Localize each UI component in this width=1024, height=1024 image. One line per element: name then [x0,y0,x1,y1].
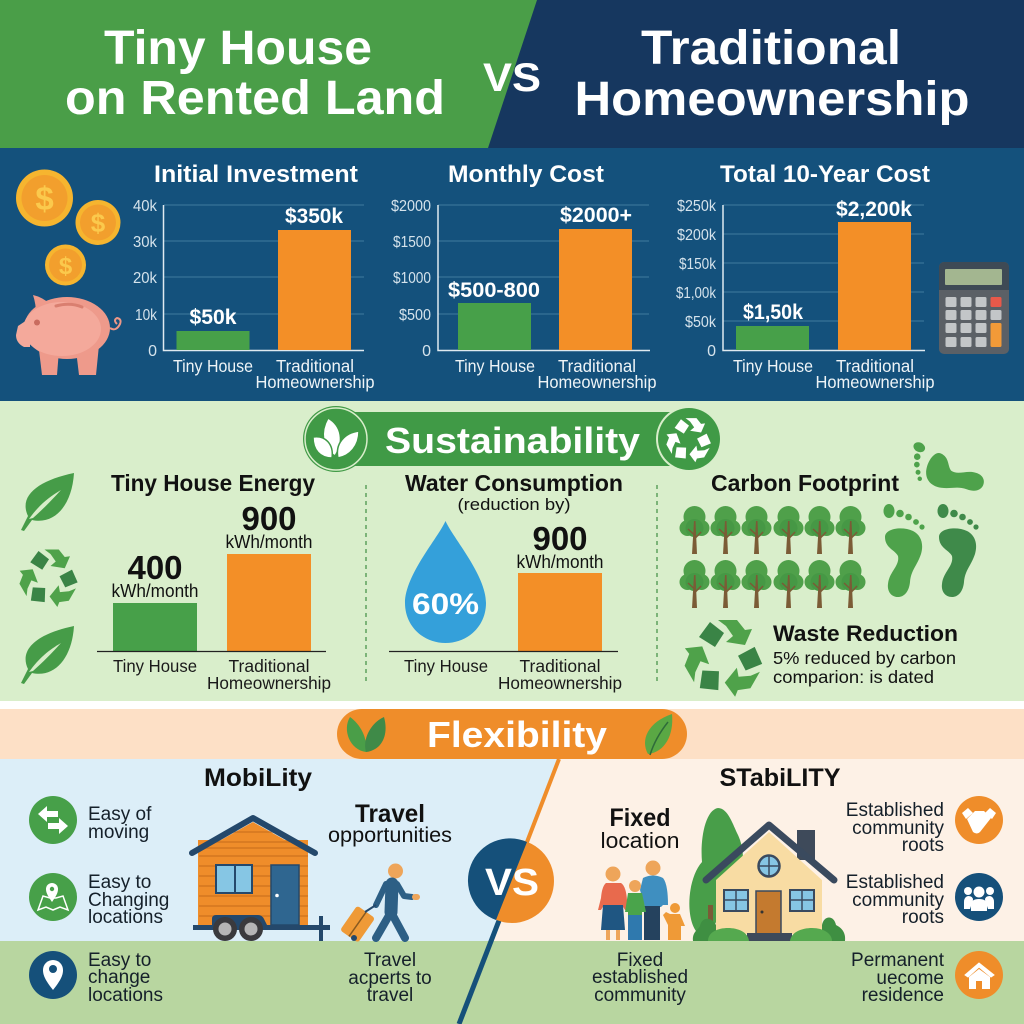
heading: flexibility: Flexibility [427,714,607,755]
chart: monthly cost: $1500 [393,234,431,251]
chart: total 10-year cost: Tiny House [733,356,813,376]
chart: initial investment: 10k [135,307,158,324]
text: fixed location [600,804,680,853]
chart title: Monthly Cost [448,161,604,188]
text: established community roots 2: roots [902,907,944,928]
bar: tiny house [736,326,809,350]
chart: water consumption: Water Consumption [405,470,623,496]
chart: water consumption: Traditional [520,656,600,676]
illustration: tiny house on trailer [192,818,330,941]
text: travel acperts to travel [348,950,432,1006]
icon: recycle left [14,550,83,610]
icon: handshake [955,796,1003,844]
text: established community roots 2 [846,872,944,928]
chart: tiny house energy: Tiny House [113,656,197,676]
text: established community roots 1: Established [846,800,944,821]
bar: 900 [518,573,602,651]
heading: mobility: MobiLity [204,764,312,792]
icon: coins: $ [59,253,73,280]
illustration: family [598,860,685,940]
chart: total 10-year cost: Traditional [836,356,914,376]
chart: total 10-year cost [676,161,934,392]
waste reduction text: comparion: is dated [773,667,934,687]
panel: costs [0,148,1024,401]
badge: vs [468,838,554,923]
bar: traditional [278,230,351,350]
waste reduction text: 5% reduced by carbon [773,648,956,668]
chart: total 10-year cost: $1,50k [743,301,803,324]
text: easy to changing locations: locations [88,907,163,928]
chart: initial investment: $50k [190,306,237,329]
text: travel opportunities [328,800,452,847]
text: established community roots 2: Established [846,872,944,893]
chart: initial investment: 20k [133,270,158,287]
chart: initial investment: Tiny House [173,356,253,376]
text: easy to changing locations [88,872,169,928]
chart: monthly cost: $500-800 [448,279,540,302]
text: fixed location: location [600,828,680,853]
header banner [0,0,1024,148]
chart: tiny house energy: 900 [241,500,297,537]
icon: location pin [29,951,77,999]
title: tiny house: Tiny House [104,22,372,75]
text: fixed established community [592,950,688,1006]
text: easy of moving [88,804,152,843]
diagonal divider [459,759,559,1024]
icon: leaf top [21,473,74,531]
chart: initial investment [133,161,374,392]
icon: footprints [884,440,988,597]
chart: initial investment: 0 [148,343,157,360]
text: easy of moving: Easy of [88,804,152,825]
chart: monthly cost: $1000 [393,270,431,287]
chart: initial investment: 40k [133,198,158,215]
icon: coins: $ [91,208,106,238]
icon: piggy bank [16,295,121,375]
text: established community roots 1 [846,800,944,856]
chart: water consumption: Homeownership [498,673,622,693]
text: travel acperts to travel: Travel [364,950,416,971]
icon: people [955,873,1003,921]
icon: house [955,951,1003,999]
icon: leaf bottom [21,626,74,684]
text: established community roots 1: community [852,818,944,839]
chart: total 10-year cost: $2,200k [836,198,912,221]
chart title: Initial Investment [154,161,358,188]
chart: monthly cost: $2000+ [560,204,632,227]
icon: coins [16,170,120,286]
chart: monthly cost [391,161,656,392]
text: established community roots 1: roots [902,835,944,856]
text: easy to changing locations: Easy to [88,872,151,893]
title: on rented land: on Rented Land [65,72,445,125]
panel: flexibility [0,709,1024,1024]
icon: trees [680,506,866,608]
title: vs: VS [483,56,541,100]
heading: sustainability [303,406,722,472]
chart: monthly cost: $2000 [391,198,431,215]
text: travel acperts to travel: acperts to [348,968,432,989]
chart: monthly cost: Homeownership [538,372,656,392]
bar: tiny house [458,303,531,350]
chart: water consumption: 900 [532,520,588,557]
chart: initial investment: Traditional [276,356,354,376]
chart: tiny house energy: Tiny House Energy [111,470,315,496]
bar: tiny house [176,331,250,350]
text: travel acperts to travel: travel [367,985,413,1006]
bar: traditional [838,222,911,350]
chart: tiny house energy: Homeownership [207,673,331,693]
chart: total 10-year cost: $150k [679,256,717,273]
heading: sustainability: Sustainability [385,420,640,461]
carbon footprint [677,440,988,701]
chart: water consumption: kWh/month [516,552,604,572]
badge: vs: VS [485,862,539,904]
text: permanent uecome residence [851,950,945,1006]
chart: water consumption: Tiny House [404,656,488,676]
chart: initial investment: Homeownership [256,372,374,392]
chart: initial investment: $350k [285,205,343,228]
chart: initial investment: 30k [133,234,158,251]
bar: 900 [227,554,311,651]
chart: water consumption: (reduction by) [458,495,570,514]
chart: tiny house energy: kWh/month [226,532,312,552]
chart: total 10-year cost: $50k [685,314,717,331]
bar: traditional [559,229,632,350]
icon: recycle [677,620,769,701]
heading: stability: STabiLITY [720,764,841,792]
chart: tiny house energy: 400 [127,549,183,586]
chart: total 10-year cost: 0 [707,343,716,360]
heading: flexibility [337,709,687,759]
chart: monthly cost: 0 [422,343,431,360]
text: fixed established community: established [592,967,688,988]
text: travel opportunities: opportunities [328,824,452,847]
icon: recycle white [662,418,715,465]
text: established community roots 2: community [852,890,944,911]
icon: leaves [313,418,359,458]
text: easy of moving: moving [88,822,149,843]
text: easy to change locations [88,950,163,1006]
waste reduction text [773,621,958,687]
chart: total 10-year cost: Homeownership [816,372,934,392]
text: fixed location: Fixed [610,804,670,832]
icon: left leaves [347,717,386,752]
icon: water drop [405,521,486,643]
chart: water consumption [389,470,623,693]
icon: map [29,873,77,921]
waste reduction text: Waste Reduction [773,621,958,646]
illustration: house with tree [689,808,845,941]
text: travel opportunities: Travel [355,800,425,828]
bar: 400 [113,603,197,651]
chart: monthly cost: $500 [399,307,431,324]
panel: sustainability [0,401,1024,701]
text: easy to change locations: Easy to [88,950,151,971]
chart: tiny house energy [97,470,331,693]
icon: coins: $ [35,180,54,217]
text: fixed established community: community [594,985,686,1006]
text: permanent uecome residence: Permanent [851,950,945,971]
text: easy to change locations: locations [88,985,163,1006]
carbon footprint: Carbon Footprint [711,470,899,496]
text: fixed established community: Fixed [617,950,663,971]
icon: arrows [29,796,77,844]
chart: total 10-year cost: $1,00k [676,285,717,302]
text: permanent uecome residence: uecome [876,968,944,989]
chart: monthly cost: Tiny House [455,356,535,376]
text: easy to changing locations: Changing [88,890,169,911]
icon: right leaf [645,714,672,755]
chart: monthly cost: Traditional [558,356,636,376]
chart: total 10-year cost: $200k [677,227,717,244]
chart: total 10-year cost: $250k [677,198,717,215]
illustration: traveler with suitcase [340,864,420,943]
title: traditional: Traditional [641,22,901,75]
icon: calculator [939,262,1009,354]
chart title: Total 10-Year Cost [720,161,930,188]
chart: tiny house energy: Traditional [228,656,310,676]
text: easy to change locations: change [88,967,150,988]
title: homeownership: Homeownership [574,73,970,126]
chart: water consumption: 60% [412,588,479,621]
text: permanent uecome residence: residence [862,985,944,1006]
chart: tiny house energy: kWh/month [112,581,198,601]
